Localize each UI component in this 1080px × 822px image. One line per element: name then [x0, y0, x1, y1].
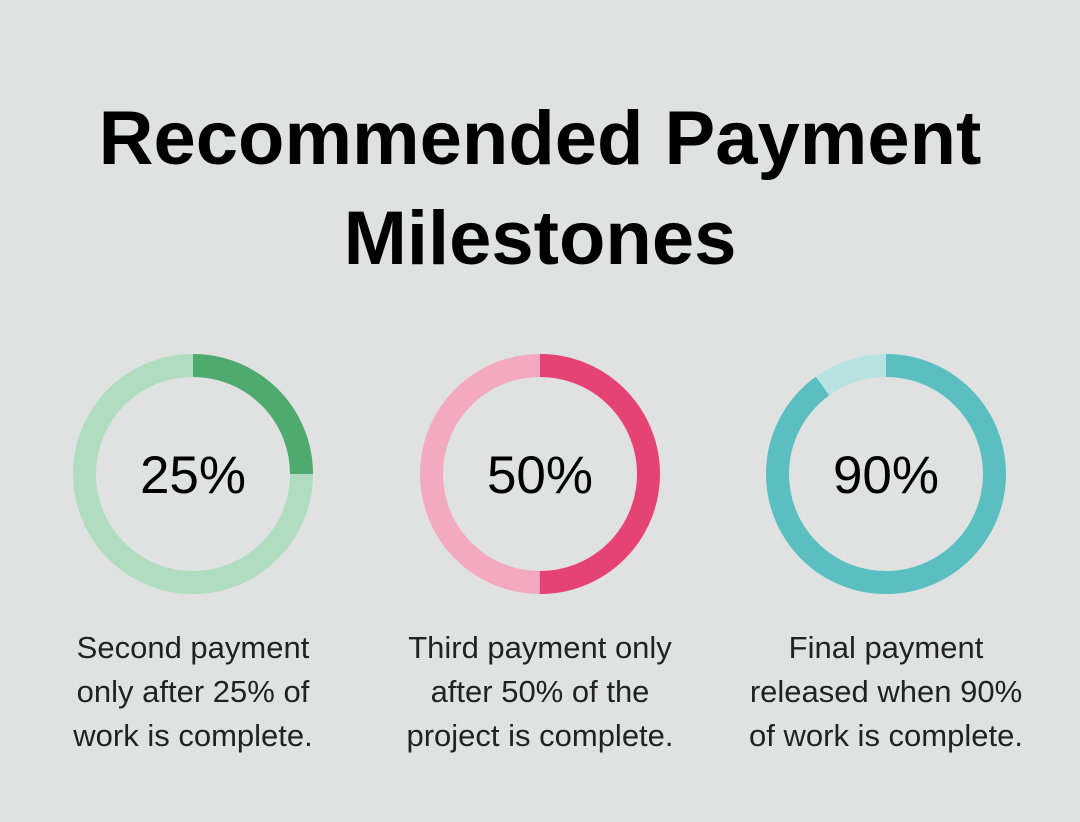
- caption: 50%: after 50% of the: [431, 674, 649, 709]
- donut: 90%: [778, 366, 994, 582]
- caption: 90%: of work is complete.: [749, 718, 1023, 753]
- title: [99, 96, 981, 281]
- caption: 50%: Third payment only: [408, 630, 672, 665]
- title: Recommended Payment: [99, 96, 981, 181]
- donut: 25%: [84, 366, 302, 582]
- caption: 25%: Second payment: [77, 630, 309, 665]
- caption: 50%: project is complete.: [406, 718, 674, 753]
- caption: 25%: [73, 630, 313, 753]
- caption: 25%: only after 25% of: [77, 674, 309, 709]
- donut: 50%: 50%: [487, 446, 593, 505]
- donut: 90%: 90%: [833, 446, 939, 505]
- donut: 25%: 25%: [140, 446, 246, 505]
- caption: 90%: [749, 630, 1023, 753]
- title: Milestones: [344, 196, 736, 281]
- caption: 90%: released when 90%: [750, 674, 1022, 709]
- caption: 50%: [406, 630, 674, 753]
- donut: 50%: [432, 366, 648, 582]
- caption: 90%: Final payment: [789, 630, 983, 665]
- caption: 25%: work is complete.: [73, 718, 313, 753]
